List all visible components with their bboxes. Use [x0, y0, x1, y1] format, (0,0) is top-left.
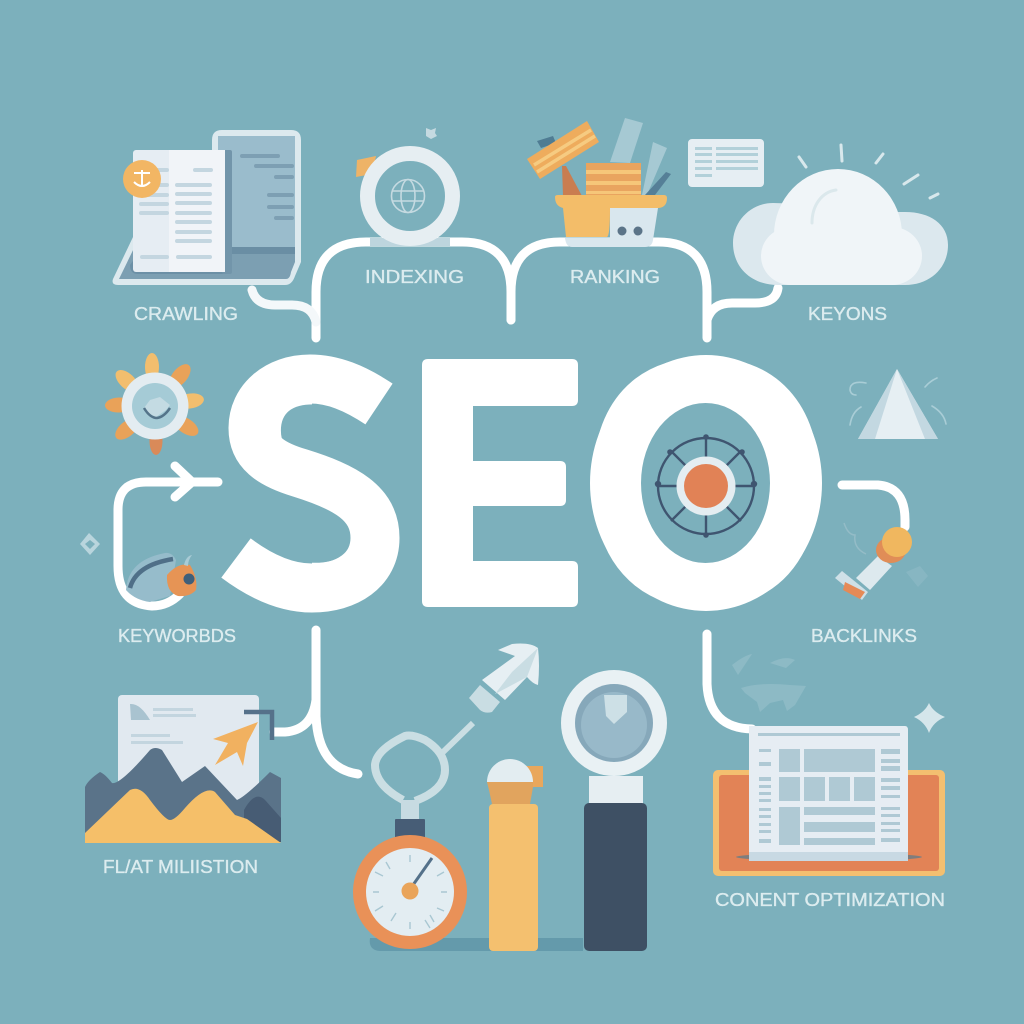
icon: target wheel	[655, 434, 757, 538]
connector lines	[252, 242, 905, 774]
label: indexing: INDEXING	[365, 267, 464, 287]
letter E: E	[406, 288, 583, 678]
icon: ranking basket	[527, 118, 671, 247]
title: SEO	[220, 285, 833, 680]
icon: yellow bottle	[487, 759, 543, 951]
label: ranking: RANKING	[570, 267, 660, 287]
letter O: O	[580, 285, 833, 680]
icon: cone tent	[850, 369, 946, 439]
label: crawling: CRAWLING	[134, 304, 238, 324]
icon: gear sun	[105, 353, 205, 455]
icon: flat mountain page	[85, 695, 281, 843]
icon: keyons cloud	[733, 145, 948, 285]
icon: orange badge	[123, 160, 161, 198]
icon: keyword helmet	[80, 533, 196, 602]
label: content optimization: CONENT OPTIMIZATION	[715, 890, 945, 910]
icon: magnifier with dark handle	[561, 670, 667, 951]
icon: sparkle	[914, 703, 945, 733]
tilted striped plank	[527, 121, 599, 179]
icon: arrow pencil	[469, 644, 539, 713]
dark mountains	[85, 748, 281, 842]
yellow mountains	[85, 789, 281, 843]
label: keyworbds: KEYWORBDS	[118, 626, 236, 646]
letter S: S	[231, 307, 396, 662]
label: flat miliistion: FL/AT MILIISTION	[103, 857, 258, 877]
striped box	[586, 163, 641, 196]
orange arrow	[213, 722, 258, 766]
label: backlinks: BACKLINKS	[811, 626, 917, 646]
page grid cells	[758, 733, 900, 845]
icon: indexing magnifier	[356, 128, 452, 246]
label: keyons: KEYONS	[808, 304, 887, 324]
icon: crawling book and tablet	[113, 130, 301, 285]
icon: content page on orange panel	[713, 726, 945, 876]
icon: small list card	[688, 139, 764, 187]
loop arrow	[118, 466, 218, 606]
icon: map silhouette	[732, 654, 806, 712]
icon: backlink brush	[835, 523, 928, 600]
icon: stopwatch with loop	[360, 723, 583, 951]
